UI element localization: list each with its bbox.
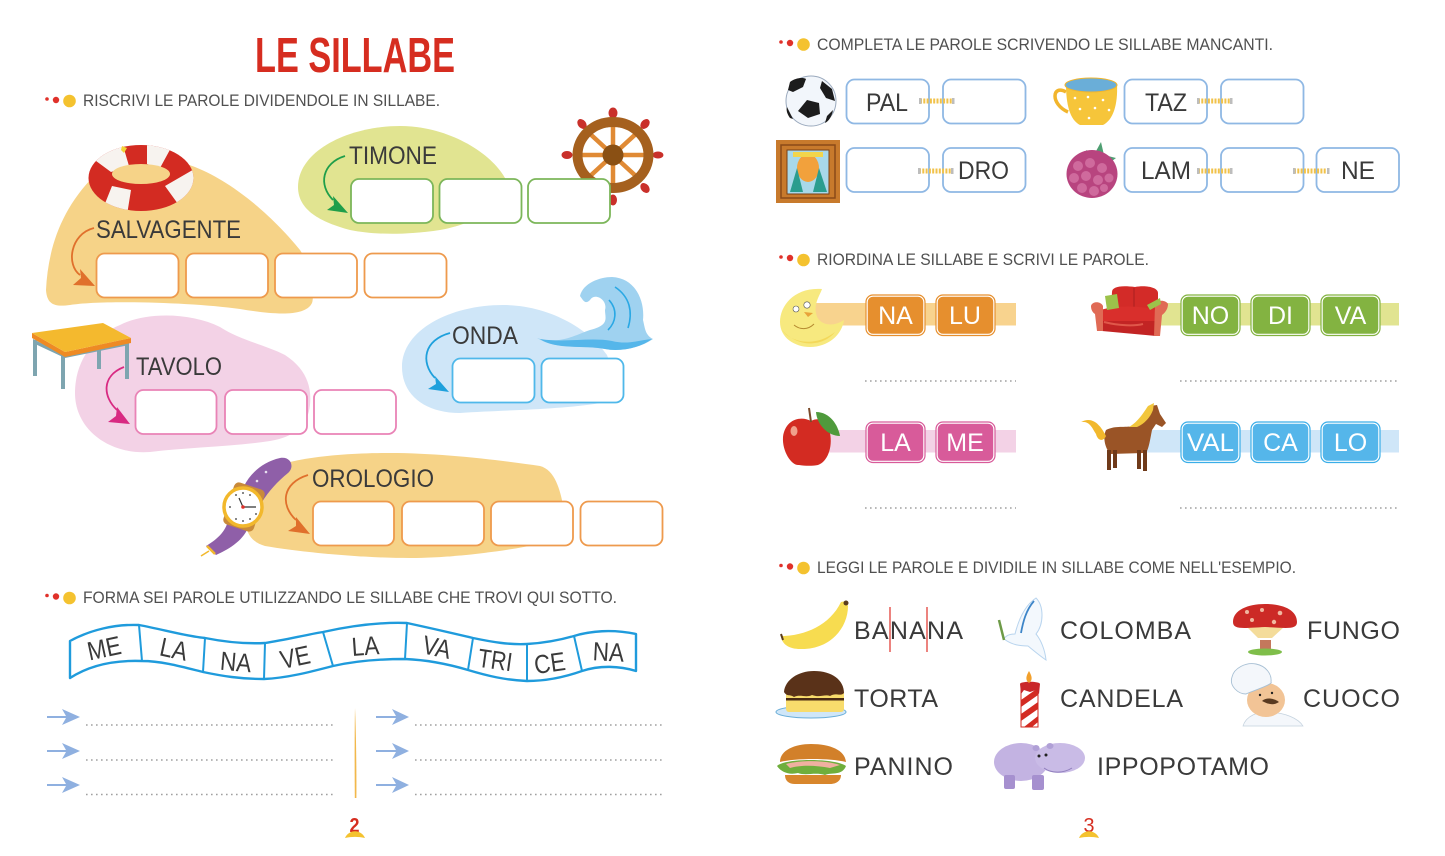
icon: sofa <box>1091 286 1168 336</box>
icon: chef <box>1231 664 1303 726</box>
answer boxes <box>136 390 396 434</box>
word list: COLOMBA <box>1060 617 1191 645</box>
answer boxes <box>313 502 662 546</box>
word: salvagente: SALVAGENTE <box>96 216 241 244</box>
syllable ribbon: CE <box>532 647 567 681</box>
word list <box>854 617 1400 781</box>
icon: banana <box>781 600 848 649</box>
icon: framed picture <box>776 140 840 203</box>
icon: sandwich <box>777 744 846 784</box>
icon: apple <box>783 408 840 466</box>
page number 3 <box>1079 815 1099 838</box>
icon: cup <box>1055 78 1117 125</box>
connector ends <box>918 98 1330 174</box>
exercise: na lu: NA <box>878 302 913 330</box>
icon: hippo <box>994 743 1085 790</box>
word list: FUNGO <box>1307 617 1400 645</box>
exercise: val ca lo: CA <box>1263 429 1298 457</box>
syllable ribbon: TRI <box>476 644 514 678</box>
syllables: PAL <box>866 89 908 117</box>
heading: completa: COMPLETA LE PAROLE SCRIVENDO LE SILLABE MANCANTI. <box>817 36 1273 54</box>
syllables: DRO <box>958 157 1009 185</box>
heading: leggi: LEGGI LE PAROLE E DIVIDILE IN SILLABE COME NELL'ESEMPIO. <box>817 559 1296 577</box>
syllable dividers on banana <box>890 607 927 652</box>
icon: mushroom <box>1233 604 1297 656</box>
heading: riscrivi: RISCRIVI LE PAROLE DIVIDENDOLE IN SILLABE. <box>83 92 440 110</box>
icon: lifebuoy <box>88 145 194 211</box>
panel: onda <box>402 277 653 413</box>
exercise: la me <box>825 422 1016 508</box>
exercise: no di va: NO <box>1192 302 1229 330</box>
syllables: NE <box>1341 157 1375 185</box>
arrow <box>324 156 348 213</box>
exercise: no di va: DI <box>1268 302 1293 330</box>
icon: watch <box>201 458 291 556</box>
syllable ribbon: VA <box>420 631 454 665</box>
word: tavolo: TAVOLO <box>136 353 222 381</box>
word list: CUOCO <box>1303 685 1400 713</box>
arrow <box>286 475 310 534</box>
connectors <box>919 101 1329 171</box>
syllable ribbon: NA <box>592 638 625 668</box>
word list: PANINO <box>854 753 953 781</box>
exercise: no di va <box>1160 295 1399 381</box>
syllable ribbon: NA <box>219 647 253 679</box>
writing lines with arrows <box>47 708 662 798</box>
word: orologio: OROLOGIO <box>312 465 434 493</box>
exercise: val ca lo <box>1120 422 1399 508</box>
icon: raspberry <box>1066 142 1118 198</box>
syllable ribbon: LA <box>351 632 381 662</box>
syllables: TAZ <box>1145 89 1187 117</box>
arrow <box>426 333 450 392</box>
icon: horse <box>1081 403 1166 471</box>
exercise: la me: LA <box>880 429 911 457</box>
syllables <box>866 89 1375 185</box>
arrow <box>72 228 95 286</box>
word list: CANDELA <box>1060 685 1183 713</box>
exercise: na lu <box>815 295 1016 381</box>
icon: dove <box>999 598 1046 660</box>
answer boxes <box>96 254 446 298</box>
panel: timone <box>298 108 664 234</box>
icon: wave <box>537 277 653 350</box>
boxes <box>846 80 1399 192</box>
exercise: val ca lo: VAL <box>1187 429 1234 457</box>
icon: ship wheel <box>562 108 664 206</box>
heading: forma: FORMA SEI PAROLE UTILIZZANDO LE SILLABE CHE TROVI QUI SOTTO. <box>83 589 617 607</box>
page number 2 <box>345 815 365 838</box>
word list: IPPOPOTAMO <box>1097 753 1269 781</box>
icon: cake <box>776 671 846 718</box>
icon: candle <box>1020 671 1040 727</box>
syllable ribbon: VE <box>278 641 313 675</box>
arrow <box>107 367 130 424</box>
word list: TORTA <box>854 685 938 713</box>
panel: tavolo <box>32 315 396 452</box>
icon: table <box>32 323 131 389</box>
answer boxes <box>351 179 610 223</box>
answer boxes <box>452 358 624 402</box>
exercise: na lu: LU <box>949 302 981 330</box>
icon: soccer ball <box>786 76 836 126</box>
word: onda: ONDA <box>452 322 518 350</box>
syllable ribbon: LA <box>157 633 191 667</box>
icon: moon <box>780 289 844 347</box>
page number 3: 3 <box>1084 815 1094 837</box>
exercise: no di va: VA <box>1335 302 1367 330</box>
syllables: LAM <box>1141 157 1191 185</box>
word list: BANANA <box>854 617 963 645</box>
exercise: complete words <box>846 80 1399 192</box>
word: timone: TIMONE <box>349 142 437 170</box>
exercise: la me: ME <box>946 429 984 457</box>
panel: salvagente <box>46 140 446 314</box>
syllable ribbon <box>70 623 636 681</box>
syllable ribbon: ME <box>85 631 124 667</box>
panel: orologio <box>201 453 662 558</box>
title: LE SILLABE <box>255 29 455 83</box>
page number 2: 2 <box>350 815 360 837</box>
exercise: val ca lo: LO <box>1334 429 1367 457</box>
heading: riordina: RIORDINA LE SILLABE E SCRIVI LE PAROLE. <box>817 251 1149 269</box>
